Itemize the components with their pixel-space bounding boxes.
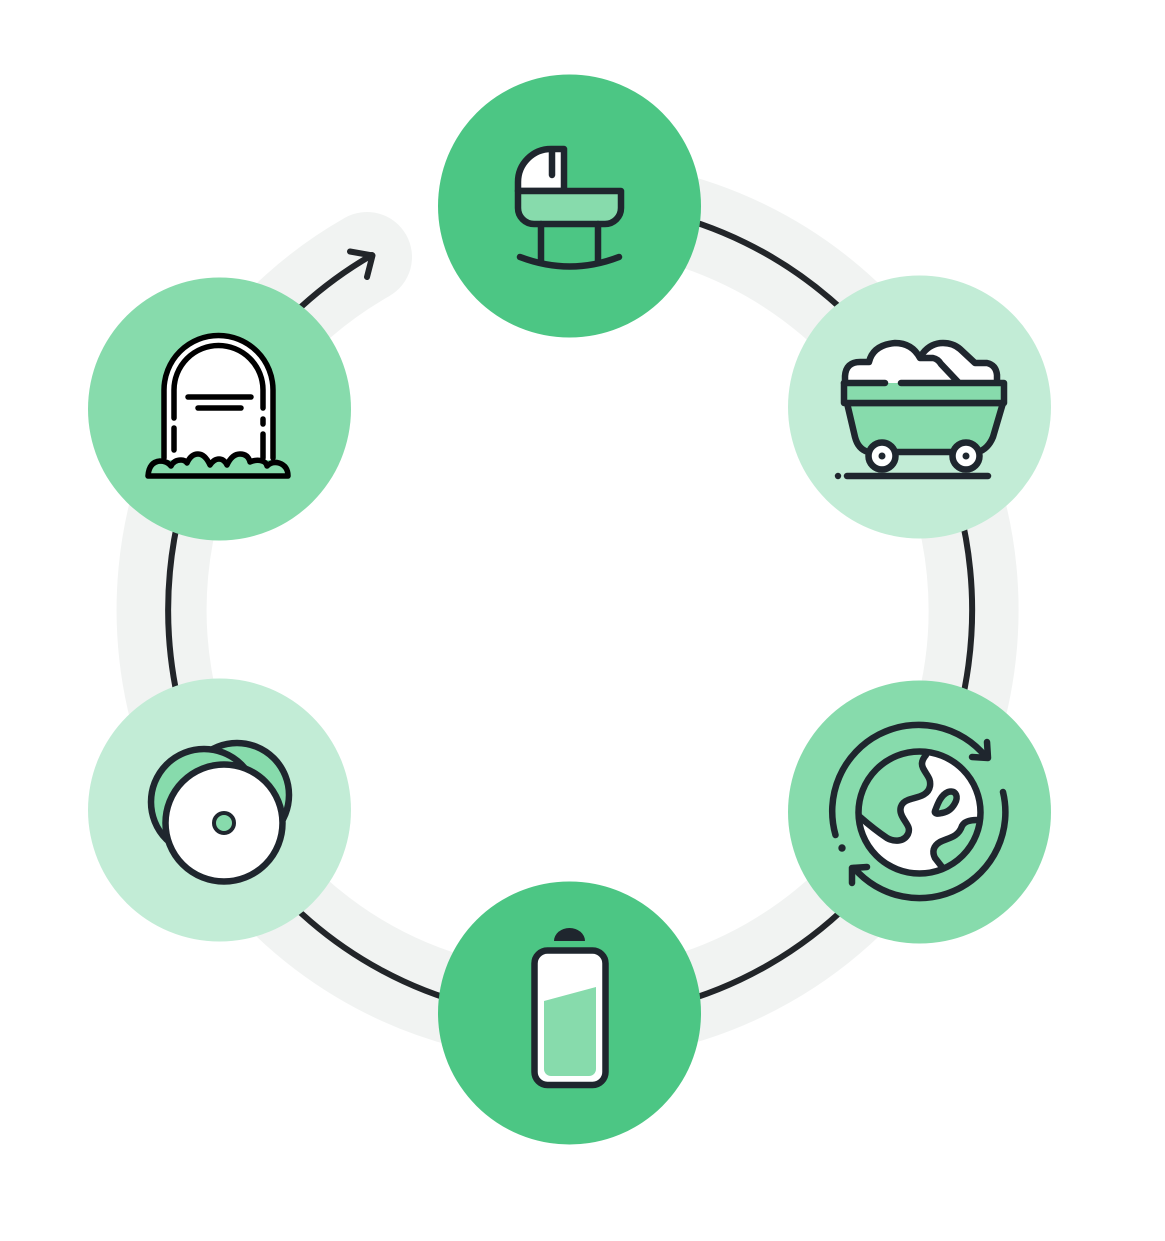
icon: mining cart	[835, 343, 1004, 479]
icon: cradle	[518, 149, 621, 266]
icon: gravestone	[148, 336, 288, 476]
icon: recycling globe	[832, 725, 1005, 898]
node: cradle	[438, 74, 701, 338]
background ring band	[162, 204, 974, 1016]
node: disc	[88, 678, 351, 942]
icon: disc	[151, 743, 289, 882]
icon: battery	[534, 928, 606, 1085]
node: recycling globe	[788, 680, 1051, 944]
node: gravestone	[88, 278, 351, 540]
node: battery	[438, 882, 701, 1144]
cycle line with arrow	[168, 202, 972, 1018]
node: mining cart	[788, 276, 1051, 538]
